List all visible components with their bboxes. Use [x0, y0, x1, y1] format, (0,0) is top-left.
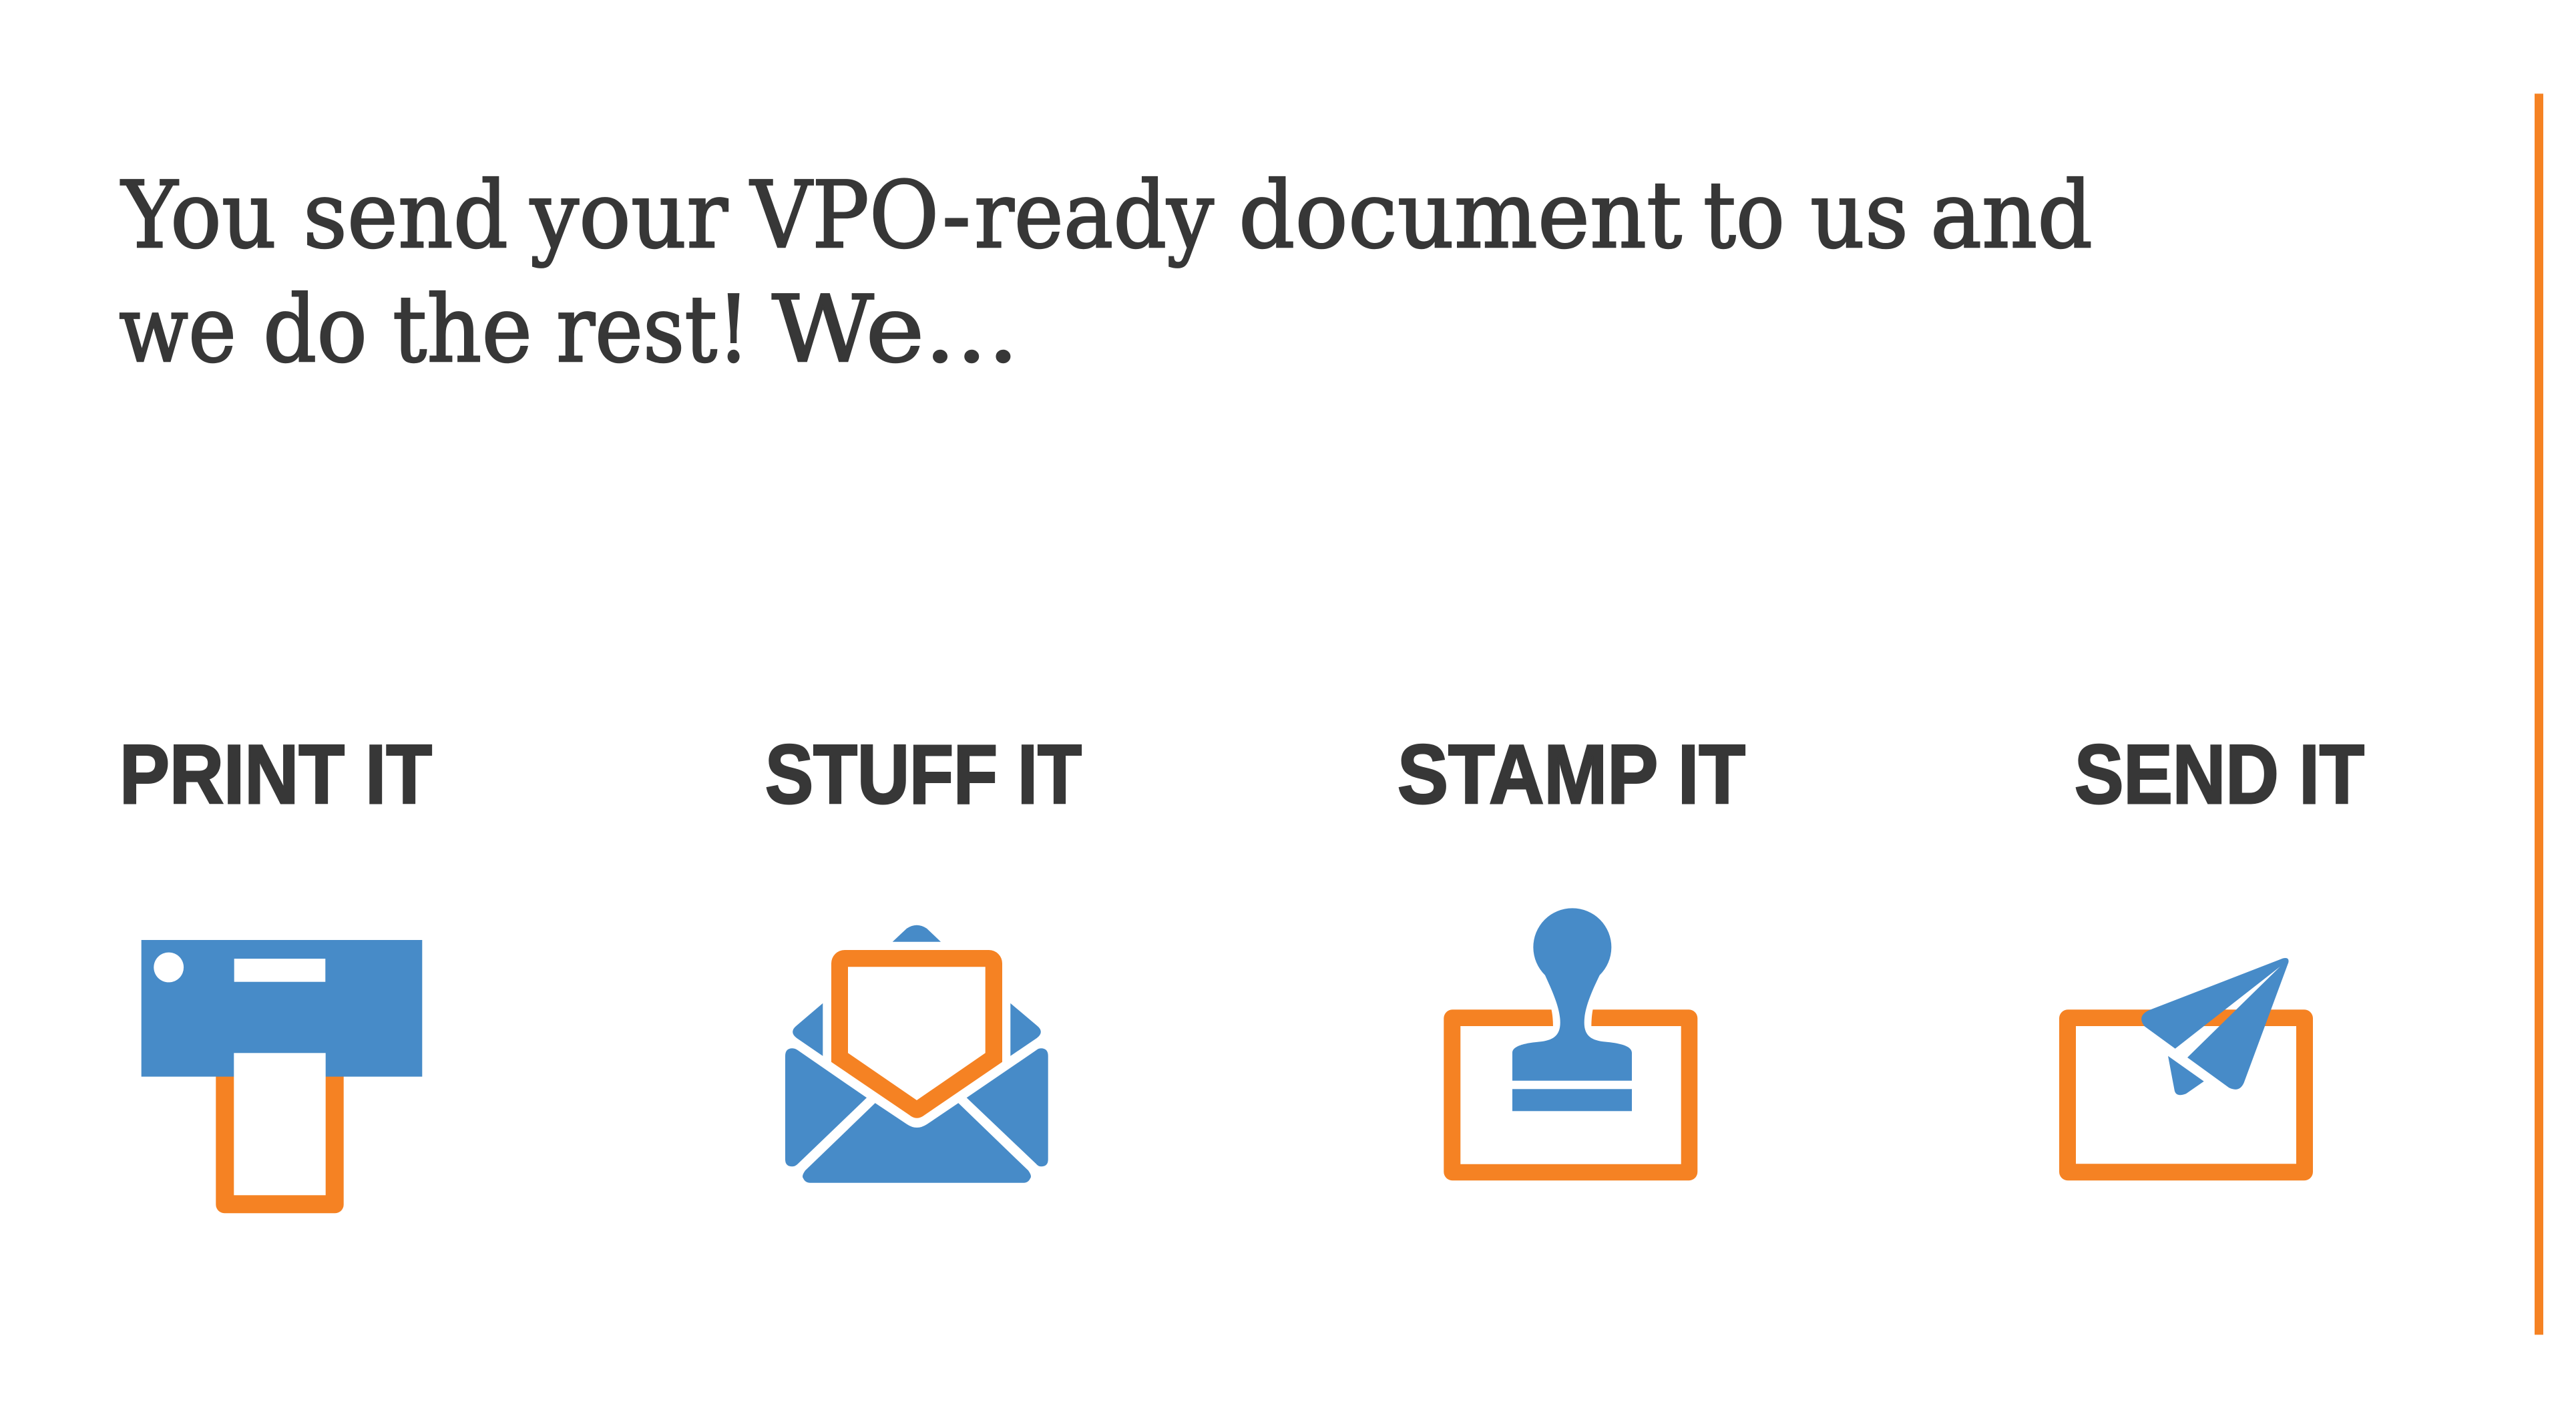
text block: intro: send	[303, 162, 508, 269]
text block: intro: document	[1239, 162, 1682, 269]
text block: intro: You	[120, 162, 276, 269]
plane tail	[2168, 1056, 2204, 1095]
text block: intro: and	[1930, 162, 2093, 269]
printer paper	[234, 1053, 326, 1195]
letter	[831, 950, 1002, 1118]
text block: intro: do	[263, 276, 367, 383]
text block: intro: your	[529, 162, 728, 269]
text block: intro: VPO-	[749, 162, 971, 269]
heading: stamp it: STAMP IT	[1398, 728, 1745, 821]
orange side rule	[2535, 93, 2543, 1335]
envelope front	[803, 1103, 1031, 1183]
text block: intro: us	[1810, 162, 1908, 269]
stamp base	[1512, 1089, 1632, 1111]
text block: intro: ready	[974, 162, 1214, 269]
envelope flap tip	[893, 925, 941, 942]
text block: intro	[119, 162, 2093, 383]
icon: envelope	[785, 925, 1048, 1183]
text block: intro: the	[393, 276, 532, 383]
text block: intro: We...	[772, 276, 1019, 383]
icon: printer	[142, 940, 422, 1213]
printer body	[142, 940, 422, 1077]
plane body	[2141, 958, 2289, 1090]
text block: intro: to	[1703, 162, 1785, 269]
stamp handle	[1512, 908, 1632, 1081]
text block: intro: rest!	[556, 276, 750, 383]
frame gap	[1551, 1008, 1593, 1027]
icon: stamp	[1444, 908, 1697, 1180]
stamp frame	[1444, 1009, 1697, 1180]
heading: stuff it: STUFF IT	[765, 728, 1082, 821]
printer slot	[234, 959, 325, 982]
heading: print it: PRINT IT	[120, 728, 432, 821]
printer light	[154, 953, 184, 982]
icon: paper plane	[2059, 958, 2313, 1180]
envelope flap right	[1010, 1003, 1041, 1056]
envelope flap left	[793, 1003, 823, 1056]
plane frame	[2059, 1009, 2313, 1180]
envelope side left	[785, 1048, 867, 1166]
heading: send it: SEND IT	[2075, 728, 2364, 821]
printer tray	[216, 1068, 344, 1213]
envelope side right	[967, 1048, 1048, 1166]
text block: intro: we	[119, 276, 236, 383]
